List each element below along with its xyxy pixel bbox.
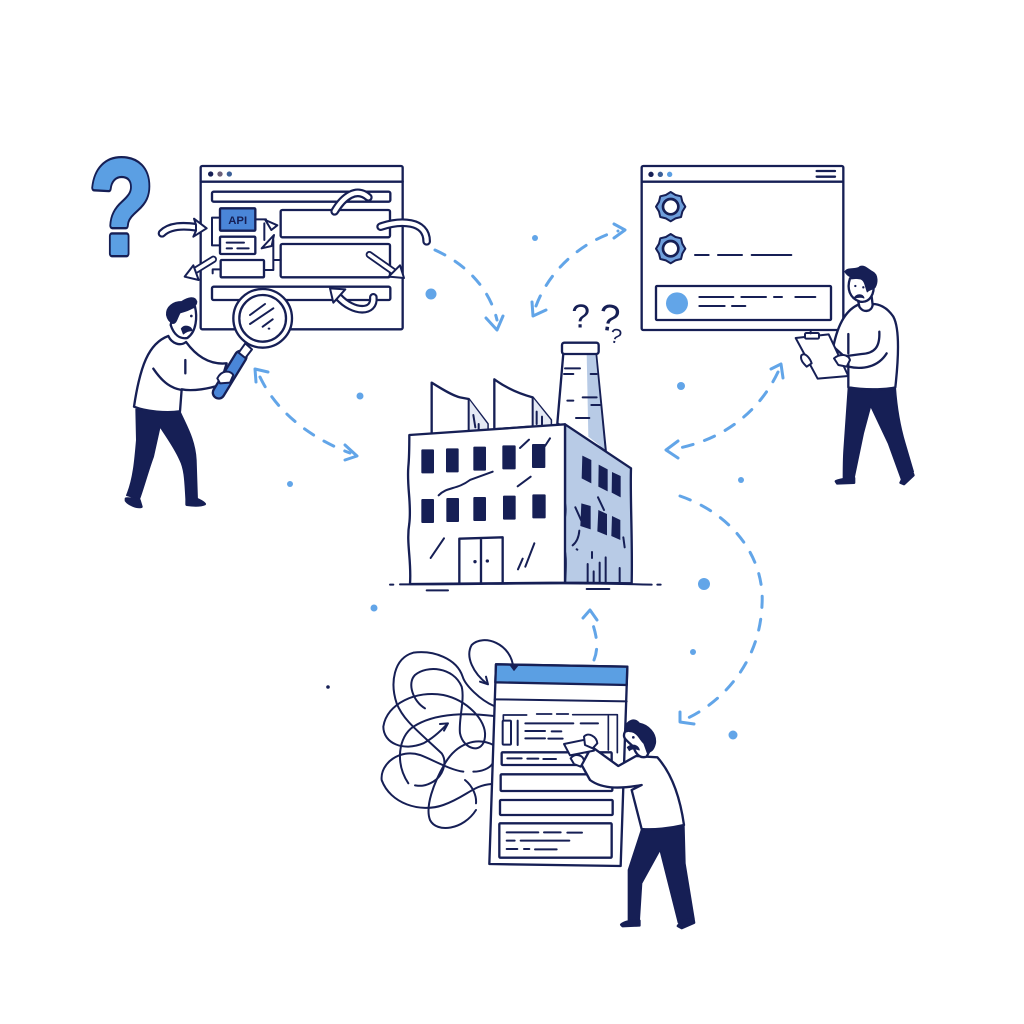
shirt [134, 336, 227, 412]
cracks [431, 438, 625, 583]
small question marks: ? [571, 298, 590, 335]
hand [217, 372, 233, 383]
magnifier lens [233, 289, 292, 348]
trousers [127, 409, 197, 501]
tangled line scribble [382, 640, 513, 828]
browser window [642, 166, 843, 330]
placeholder lines [695, 252, 791, 258]
front windows [421, 444, 546, 523]
icon: big question mark: ? [89, 132, 153, 283]
head [171, 307, 196, 338]
dashed arrow: person and factory [255, 369, 357, 460]
panel: tangled form with person [382, 640, 694, 928]
tall form window [489, 664, 627, 866]
dashed arrow: form to factory [583, 610, 597, 660]
decorative dots [287, 235, 744, 740]
magnifier handle [219, 357, 241, 393]
dashed arrow: factory and settings [532, 224, 625, 316]
dashed arrow: browser to factory [435, 250, 503, 330]
side windows [580, 456, 621, 540]
panel: factory building [390, 295, 661, 590]
browser window [201, 166, 403, 329]
status card [656, 286, 831, 320]
roof sheds [432, 379, 551, 434]
side wall [561, 424, 632, 583]
small question marks [571, 295, 624, 349]
icon: gear [656, 234, 685, 263]
ground line [390, 583, 661, 590]
dashed arrow: factory to form [680, 496, 762, 724]
person with magnifier [126, 289, 292, 507]
small question marks: ? [608, 324, 624, 349]
icon: big question mark: ? [89, 132, 153, 283]
API box: API [228, 215, 247, 227]
person holding card [564, 720, 694, 928]
front wall [408, 424, 565, 584]
dashed arrow: settings person and factory [666, 364, 783, 458]
tangled white arrows [162, 193, 427, 309]
door [459, 537, 503, 583]
panel: tangled API window with confused person [89, 132, 427, 507]
chimney [557, 343, 606, 451]
small question marks: ? [596, 295, 623, 340]
icon: gear [656, 192, 685, 221]
API box [220, 208, 255, 231]
panel: settings window with worried person [642, 166, 913, 484]
person with clipboard [796, 266, 913, 484]
